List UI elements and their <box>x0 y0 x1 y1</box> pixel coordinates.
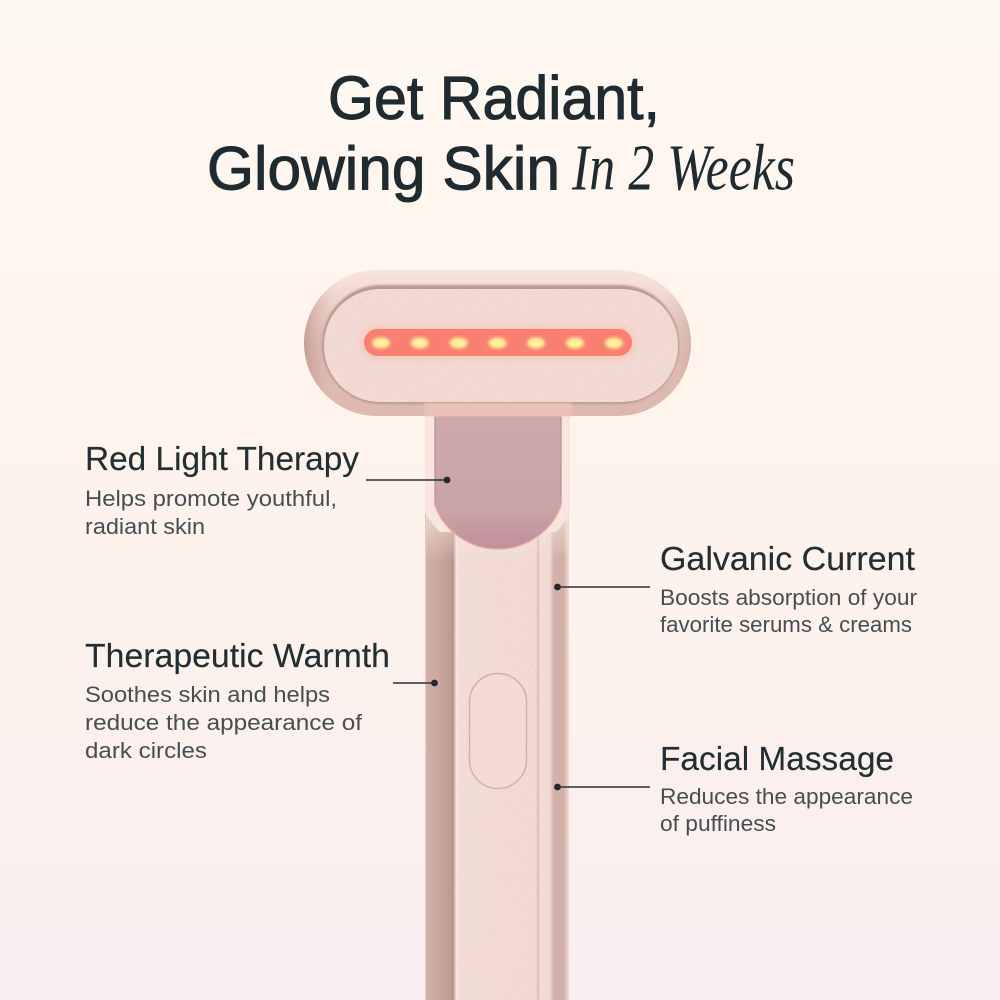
callout: Therapeutic Warmth: Therapeutic Warmth <box>85 638 390 675</box>
wand button <box>470 674 526 788</box>
title: In 2 Weeks <box>571 132 795 204</box>
callout: Red Light Therapy: radiant skin <box>85 514 205 539</box>
callout: Red Light Therapy <box>85 441 450 539</box>
callout: Facial Massage: Facial Massage <box>660 741 894 778</box>
wand handle <box>425 500 569 1000</box>
callout: Galvanic Current: favorite serums & creams <box>660 612 912 637</box>
callout: Galvanic Current: Galvanic Current <box>660 541 916 578</box>
device: facial wand <box>304 270 691 1000</box>
callout: Galvanic Current <box>554 541 918 637</box>
callout: Facial Massage <box>554 741 913 836</box>
title <box>207 64 795 204</box>
wand neck <box>425 412 570 549</box>
LED light strip <box>362 327 634 358</box>
callout: Facial Massage: Reduces the appearance <box>660 784 913 809</box>
callout: Red Light Therapy: Helps promote youthful, <box>85 486 337 511</box>
wand head <box>304 270 691 416</box>
callout: Therapeutic Warmth: Soothes skin and helps <box>85 682 330 707</box>
callout: Galvanic Current: Boosts absorption of your <box>660 585 918 610</box>
callout: Therapeutic Warmth <box>85 638 438 763</box>
callout: Red Light Therapy: Red Light Therapy <box>85 441 359 478</box>
callout: Therapeutic Warmth: dark circles <box>85 738 207 763</box>
callout: Facial Massage: of puffiness <box>660 811 776 836</box>
callout: Therapeutic Warmth: reduce the appearance of <box>85 710 363 735</box>
title: Get Radiant, <box>328 64 660 132</box>
title: Glowing Skin <box>207 134 560 202</box>
